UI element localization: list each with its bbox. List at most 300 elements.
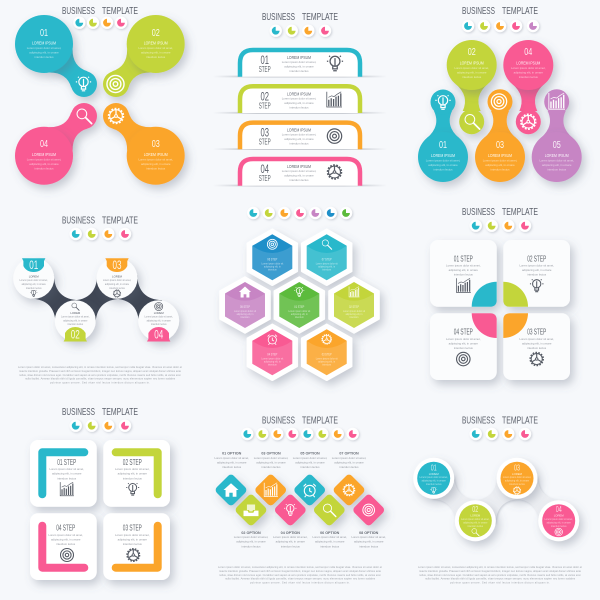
option 07 — [332, 452, 366, 507]
option 02: interdum lectus — [242, 544, 261, 548]
step 03: STEP — [259, 138, 271, 147]
pin 05: LOREM IPSUM — [545, 153, 569, 158]
title: TEMPLATE — [502, 414, 538, 426]
hexagon pink: interdum — [268, 363, 277, 366]
connectors — [431, 475, 562, 524]
pin 04: adipiscing elit, in ornare — [514, 70, 543, 74]
paragraph: tellus, vitae dictum nisl cursus eget. Curabitur sed sapien at arcu pretium vulputate, morbi rhoncus mauris sed felis mollis, at varius erat — [220, 573, 381, 577]
panel: honeycomb — [220, 207, 379, 380]
option 07: interdum lectus — [340, 465, 359, 469]
hexagon teal: interdum — [322, 268, 331, 271]
hexagon lime — [329, 277, 379, 333]
paragraph: nulla facilisi. Aenean blandit nibh id ligula convallis, vitae tempus neque semper, nunc elementum sapien nec lorem sodales — [425, 576, 576, 580]
node 03: 03 — [514, 464, 520, 472]
title: BUSINESS — [62, 214, 95, 226]
lobe 02: Lorem ipsum dolor sit amet, — [138, 46, 173, 50]
option 02 — [234, 493, 268, 548]
hexagon green: 01 STEP — [294, 305, 305, 309]
card 04 — [430, 313, 497, 380]
step 02: 02 — [260, 89, 269, 103]
node 02: interdum lectus — [68, 323, 84, 326]
colour key — [70, 228, 131, 240]
card 02 — [103, 440, 170, 507]
option 03: interdum lectus — [262, 465, 281, 469]
node 03: Lorem ipsum dolor sit amet, — [103, 279, 132, 282]
hexagon orange: Lorem ipsum dolor sit — [316, 357, 338, 360]
hexagon blue: 06 STEP — [267, 257, 278, 261]
card 04: 04 STEP — [56, 524, 75, 533]
step 03: adipiscing elit, in ornare — [284, 137, 314, 141]
card 03 — [503, 313, 570, 380]
card 03: 03 STEP — [527, 328, 546, 336]
step 03 — [213, 123, 387, 150]
lobe 03: adipiscing elit, in ornare — [141, 162, 171, 166]
colour key — [462, 20, 539, 32]
panel: five pins — [418, 5, 582, 182]
step 01: LOREM IPSUM — [287, 55, 311, 60]
node 03 — [96, 258, 138, 299]
hexagon lime: 02 STEP — [349, 305, 360, 309]
node 01: Lorem ipsum dolor sit amet, — [420, 476, 448, 479]
step 04: STEP — [259, 174, 271, 183]
card 02: interdum lectus — [527, 272, 547, 276]
option 07: adipiscing elit, in ornare — [334, 460, 364, 464]
pin 01: LOREM IPSUM — [431, 153, 455, 158]
node 04: Lorem ipsum dolor sit amet, — [145, 316, 173, 318]
card 02: interdum lectus — [123, 476, 142, 480]
step 04 — [213, 159, 387, 186]
option 05: interdum lectus — [301, 465, 320, 469]
hexagon purple — [220, 277, 270, 333]
step 02: Lorem ipsum dolor sit amet, — [282, 96, 316, 100]
pin 04: Lorem ipsum dolor sit amet, — [511, 66, 546, 70]
card 03: Lorem ipsum dolor sit amet, — [519, 337, 554, 341]
pin 05: interdum lectus — [547, 168, 567, 172]
lobe 02: LOREM IPSUM — [144, 40, 168, 46]
step 04: Lorem ipsum dolor sit amet, — [282, 169, 316, 173]
title: BUSINESS — [62, 406, 95, 418]
node 02 — [455, 500, 496, 541]
option 06: 06 OPTION — [320, 531, 340, 535]
panel: four lobes — [15, 5, 185, 185]
title: TEMPLATE — [102, 214, 138, 226]
title: BUSINESS — [262, 11, 295, 23]
step 01 — [213, 50, 387, 77]
hexagon green: interdum — [295, 316, 304, 319]
node 02 — [55, 300, 96, 342]
pin 04: 04 — [524, 47, 533, 58]
paragraph: mauris interdum gravida. Praesent sed nibh at lorem feugiat tincidunt, integer nec lectus magna, aliquam erat volutpat donec ultrices ante — [19, 369, 182, 373]
lobe 01: 01 — [40, 28, 48, 39]
card 03: Lorem ipsum dolor sit amet, — [115, 533, 150, 537]
node 03: Lorem ipsum dolor sit amet, — [503, 476, 532, 479]
hexagon pink: Lorem ipsum dolor sit — [261, 357, 284, 360]
hexagon green — [274, 277, 324, 333]
lobe 02: interdum lectus — [146, 55, 166, 59]
pin 01 — [418, 90, 468, 182]
title — [462, 414, 538, 426]
lobe 04: LOREM IPSUM — [32, 152, 56, 157]
colour key — [470, 428, 531, 440]
step 03: interdum lectus — [290, 142, 309, 146]
node 04 — [538, 500, 579, 541]
card 01: adipiscing elit, in ornare — [449, 268, 478, 272]
node 04 — [138, 300, 179, 342]
card 04: 04 STEP — [454, 328, 473, 336]
card 03: adipiscing elit, in ornare — [522, 342, 552, 346]
card 03: interdum lectus — [123, 542, 142, 546]
lobe 02: adipiscing elit, in ornare — [141, 50, 171, 54]
step 04: adipiscing elit, in ornare — [284, 174, 314, 178]
card 02: 02 STEP — [123, 458, 142, 467]
hexagon lime: interdum — [350, 316, 359, 319]
hexagon orange: adipiscing elit, in — [318, 360, 336, 363]
card 04: adipiscing elit, in ornare — [51, 538, 81, 542]
node 01: LOREM — [429, 472, 439, 476]
node 04: adipiscing elit, in ornare — [147, 320, 171, 322]
step 01: STEP — [259, 65, 271, 74]
pin 02: Lorem ipsum dolor sit amet, — [454, 66, 489, 70]
step 02 — [213, 86, 387, 114]
option 04: interdum lectus — [281, 544, 300, 548]
card 03: adipiscing elit, in ornare — [118, 538, 147, 542]
option 07: Lorem ipsum dolor sit amet, — [332, 456, 366, 460]
pin 05: Lorem ipsum dolor sit amet, — [539, 158, 574, 162]
node 01: interdum lectus — [26, 287, 42, 290]
node 04: LOREM — [554, 514, 564, 518]
title — [62, 214, 138, 226]
pin 01: interdum lectus — [434, 168, 453, 172]
node 03: interdum lectus — [509, 483, 526, 486]
paragraph: mauris interdum gravida. Praesent sed nibh at lorem feugiat tincidunt, integer nec lectus magna, aliquam erat volutpat donec ultrices ante — [419, 569, 582, 573]
title: BUSINESS — [462, 5, 495, 17]
card 03: 03 STEP — [123, 524, 142, 533]
title — [462, 206, 538, 218]
pin 05: adipiscing elit, in ornare — [542, 163, 572, 167]
lobe 01 — [15, 15, 97, 97]
title — [462, 5, 538, 17]
hexagon pink: adipiscing elit, in — [264, 360, 281, 363]
card 01: interdum lectus — [454, 272, 473, 276]
node 01 — [13, 258, 54, 299]
colour key — [247, 207, 352, 219]
lobe 04: adipiscing elit, in ornare — [29, 162, 59, 166]
hexagon orange: 03 STEP — [322, 352, 332, 356]
option 06 — [312, 493, 347, 548]
pin 05: 05 — [553, 140, 561, 151]
step 01: Lorem ipsum dolor sit amet, — [282, 60, 316, 64]
hexagon lime: adipiscing elit, in — [346, 313, 363, 316]
step 03: LOREM IPSUM — [287, 128, 311, 133]
node 03 — [496, 458, 538, 499]
card 04: Lorem ipsum dolor sit amet, — [48, 533, 83, 537]
card 02: 02 STEP — [527, 254, 546, 263]
card 04 — [30, 513, 97, 580]
node 03: interdum lectus — [109, 287, 126, 290]
option 05: 05 OPTION — [300, 452, 320, 456]
option 07: 07 OPTION — [339, 452, 359, 456]
node 04: adipiscing elit, in ornare — [547, 521, 571, 524]
pin 01: Lorem ipsum dolor sit amet, — [426, 158, 460, 162]
lobe 02: 02 — [152, 28, 160, 39]
paragraph: tellus, vitae dictum nisl cursus eget. Curabitur sed sapien at arcu pretium vulputate, morbi rhoncus mauris sed felis mollis, at varius erat — [20, 373, 181, 377]
node 02: LOREM — [470, 514, 481, 518]
node 01: adipiscing elit, in ornare — [22, 283, 46, 286]
title — [262, 11, 338, 23]
colour key — [241, 428, 359, 440]
lobe 03: Lorem ipsum dolor sit amet, — [138, 158, 173, 162]
lobe 04: interdum lectus — [35, 166, 54, 170]
option 08: adipiscing elit, in ornare — [354, 540, 384, 544]
pin 03: Lorem ipsum dolor sit amet, — [483, 158, 517, 162]
option 05: adipiscing elit, in ornare — [295, 460, 325, 464]
node 01 — [413, 458, 454, 499]
node 02: Lorem ipsum dolor sit amet, — [61, 316, 90, 318]
node 01: interdum lectus — [426, 483, 442, 486]
lobe 04: Lorem ipsum dolor sit amet, — [27, 158, 61, 162]
node 01: LOREM — [29, 274, 39, 278]
hexagon blue: Lorem ipsum dolor sit — [261, 262, 284, 265]
option 01 — [214, 452, 249, 507]
pin 02: 02 — [468, 47, 476, 58]
title: BUSINESS — [262, 414, 295, 426]
card 01 — [430, 240, 497, 307]
colour key — [70, 420, 131, 432]
card 01 — [30, 440, 97, 507]
lobe 04: 04 — [40, 139, 48, 150]
lobe 01: adipiscing elit, in ornare — [29, 50, 59, 54]
node 04: interdum lectus — [151, 323, 167, 326]
hexagon pink: 04 STEP — [267, 352, 278, 356]
paragraph: Lorem ipsum dolor sit amet, consectetur adipiscing elit, in ornare interdum lectus, sed tempor nulla feugiat vitae. Vivamus sit amet dolor et — [218, 565, 382, 569]
pin 02: interdum lectus — [462, 75, 482, 79]
lobe 02 — [103, 15, 185, 97]
step 01: adipiscing elit, in ornare — [284, 64, 314, 68]
card 04: Lorem ipsum dolor sit amet, — [446, 337, 481, 341]
panel: dark timeline — [13, 214, 182, 384]
pin 01: adipiscing elit, in ornare — [428, 163, 458, 167]
card 01: Lorem ipsum dolor sit amet, — [49, 467, 84, 471]
lobe 04 — [15, 103, 97, 185]
lobe 01: LOREM IPSUM — [32, 40, 56, 46]
paragraph — [18, 365, 182, 384]
option 04 — [273, 493, 308, 548]
step 03: 03 — [260, 126, 269, 140]
panel: diamond options — [214, 414, 386, 584]
pin 04: LOREM IPSUM — [516, 60, 540, 66]
hexagon lime: Lorem ipsum dolor sit — [343, 310, 365, 313]
node 01: adipiscing elit, in ornare — [422, 480, 446, 482]
pin 01: 01 — [439, 140, 447, 151]
paragraph — [418, 565, 582, 584]
node 04: 04 — [154, 330, 164, 342]
step 04: 04 — [260, 162, 269, 176]
title: TEMPLATE — [302, 414, 338, 426]
paragraph: nulla facilisi. Aenean blandit nibh id ligula convallis, vitae tempus neque semper, nunc elementum sapien nec lorem sodales — [225, 576, 376, 580]
pin 02: LOREM IPSUM — [460, 60, 484, 66]
hexagon purple: 05 STEP — [240, 305, 251, 309]
step 04: interdum lectus — [290, 178, 309, 182]
pin 05 — [532, 89, 582, 182]
node 02: 02 — [472, 505, 479, 514]
node 02: interdum lectus — [468, 525, 484, 528]
option 02: Lorem ipsum dolor sit amet, — [234, 535, 268, 539]
paragraph — [218, 565, 382, 584]
paragraph: Lorem ipsum dolor sit amet, consectetur adipiscing elit, in ornare interdum lectus, sed tempor nulla feugiat vitae. Vivamus sit amet dolor et — [418, 565, 582, 569]
option 01: adipiscing elit, in ornare — [217, 460, 247, 464]
node 03: 03 — [112, 260, 122, 272]
option 06: adipiscing elit, in ornare — [315, 540, 345, 544]
node 03: adipiscing elit, in ornare — [105, 283, 130, 286]
step 02: adipiscing elit, in ornare — [284, 101, 314, 105]
option 08: interdum lectus — [359, 544, 379, 548]
hexagon purple: adipiscing elit, in — [237, 313, 254, 316]
option 05 — [293, 452, 327, 507]
pin 03: LOREM IPSUM — [488, 153, 512, 158]
node 03: LOREM — [512, 472, 523, 476]
node 04: 04 — [556, 505, 562, 514]
title: TEMPLATE — [302, 11, 338, 23]
card 04: adipiscing elit, in ornare — [449, 342, 478, 346]
colour key — [270, 24, 331, 37]
option 04: Lorem ipsum dolor sit amet, — [273, 535, 308, 539]
node 03: LOREM — [112, 274, 123, 278]
node 02: adipiscing elit, in ornare — [63, 320, 88, 322]
step 02: LOREM IPSUM — [287, 91, 311, 96]
pin 03: 03 — [496, 140, 504, 151]
hexagon blue: interdum — [268, 268, 277, 271]
title: TEMPLATE — [502, 5, 538, 17]
colour key — [470, 220, 531, 232]
option 01: 01 OPTION — [222, 452, 242, 456]
card 02: Lorem ipsum dolor sit amet, — [519, 264, 554, 268]
title: BUSINESS — [62, 5, 95, 17]
title — [62, 406, 138, 418]
option 04: adipiscing elit, in ornare — [276, 540, 305, 544]
hexagon orange: interdum — [322, 363, 331, 366]
card 02: adipiscing elit, in ornare — [118, 472, 147, 476]
step 02: interdum lectus — [290, 105, 309, 109]
card 01: 01 STEP — [454, 254, 473, 263]
node 01: 01 — [29, 260, 38, 272]
paragraph: nulla facilisi. Aenean blandit nibh id ligula convallis, vitae tempus neque semper, nunc elementum sapien nec lorem sodales — [25, 376, 176, 380]
hexagon teal: adipiscing elit, in — [318, 265, 336, 268]
card 01: 01 STEP — [57, 458, 76, 467]
hexagon green: Lorem ipsum dolor sit — [288, 310, 311, 313]
option 01: interdum lectus — [222, 465, 242, 469]
lobe 03 — [103, 103, 185, 185]
step 01: interdum lectus — [290, 69, 309, 73]
panel: stacked steps — [213, 11, 387, 186]
card 03: interdum lectus — [527, 346, 547, 350]
panel: four cards with quarter circles — [430, 206, 570, 380]
hexagon purple: interdum — [241, 316, 250, 319]
paragraph: tellus, vitae dictum nisl cursus eget. Curabitur sed sapien at arcu pretium vulputate, morbi rhoncus mauris sed felis mollis, at varius erat — [420, 573, 581, 577]
connectors — [31, 275, 162, 324]
option 08: 08 OPTION — [359, 531, 379, 535]
title: BUSINESS — [462, 414, 495, 426]
lobe 01: interdum lectus — [35, 55, 54, 59]
pin 02: adipiscing elit, in ornare — [457, 70, 487, 74]
option 05: Lorem ipsum dolor sit amet, — [293, 456, 327, 460]
step 04: LOREM IPSUM — [287, 164, 311, 169]
option 04: 04 OPTION — [281, 531, 300, 535]
pin 03 — [475, 89, 525, 182]
step 03: Lorem ipsum dolor sit amet, — [282, 133, 316, 137]
step 02: STEP — [259, 101, 271, 110]
option 06: interdum lectus — [320, 544, 340, 548]
title: TEMPLATE — [502, 206, 538, 218]
lobe 03: interdum lectus — [146, 166, 166, 170]
card 02: Lorem ipsum dolor sit amet, — [115, 467, 150, 471]
option 03 — [254, 452, 288, 507]
option 03: adipiscing elit, in ornare — [256, 460, 286, 464]
lobe 03: LOREM IPSUM — [144, 152, 168, 157]
node 04: Lorem ipsum dolor sit amet, — [545, 518, 573, 521]
pin 04: interdum lectus — [519, 75, 538, 79]
node 01: Lorem ipsum dolor sit amet, — [20, 279, 48, 282]
pin 04 — [503, 40, 553, 134]
node 03: adipiscing elit, in ornare — [505, 480, 530, 482]
node 02: adipiscing elit, in ornare — [463, 521, 488, 524]
hexagon pink — [247, 324, 297, 380]
paragraph: pulvinar quam ornare. Sed vitae nisl lectus interdum dictum aliquam in. — [450, 580, 550, 584]
card 01: adipiscing elit, in ornare — [52, 472, 82, 476]
node 02: Lorem ipsum dolor sit amet, — [461, 518, 490, 521]
hexagon blue — [247, 229, 297, 285]
title: TEMPLATE — [102, 406, 138, 418]
lobe 03: 03 — [152, 139, 160, 150]
pin 03: adipiscing elit, in ornare — [485, 163, 515, 167]
card 04: interdum lectus — [454, 346, 473, 350]
card 01: interdum lectus — [57, 476, 77, 480]
lobe 01: Lorem ipsum dolor sit amet, — [27, 46, 61, 50]
panel: four cards with corner brackets — [30, 406, 170, 580]
hexagon purple: Lorem ipsum dolor sit — [234, 310, 256, 313]
option 08 — [351, 493, 386, 548]
hexagon teal: 07 STEP — [322, 257, 332, 261]
colour key — [73, 16, 127, 29]
option 03: 03 OPTION — [261, 452, 281, 456]
hexagon orange — [302, 324, 352, 380]
option 08: Lorem ipsum dolor sit amet, — [351, 535, 386, 539]
node 02: 02 — [71, 330, 80, 342]
option 06: Lorem ipsum dolor sit amet, — [312, 535, 347, 539]
title: TEMPLATE — [102, 5, 138, 17]
option 01: Lorem ipsum dolor sit amet, — [214, 456, 249, 460]
panel: ringed circles timeline — [413, 414, 582, 584]
option 02: 02 OPTION — [241, 531, 261, 535]
title — [262, 414, 338, 426]
node 02: LOREM — [70, 311, 81, 315]
card 01: Lorem ipsum dolor sit amet, — [446, 264, 481, 268]
option 02: adipiscing elit, in ornare — [236, 540, 266, 544]
node 01: 01 — [431, 464, 437, 472]
node 04: LOREM — [154, 311, 164, 315]
hexagon teal: Lorem ipsum dolor sit — [316, 262, 338, 265]
step 01: 01 — [260, 53, 269, 67]
pin 02 — [447, 40, 497, 134]
hexagon blue: adipiscing elit, in — [264, 265, 281, 268]
title — [62, 5, 138, 17]
card 02 — [503, 240, 570, 307]
paragraph: pulvinar quam ornare. Sed vitae nisl lectus interdum dictum aliquam in. — [250, 580, 350, 584]
pin 03: interdum lectus — [491, 168, 510, 172]
card 03 — [103, 513, 170, 580]
paragraph: pulvinar quam ornare. Sed vitae nisl lectus interdum dictum aliquam in. — [50, 380, 150, 384]
card 02: adipiscing elit, in ornare — [522, 268, 552, 272]
card 04: interdum lectus — [56, 542, 76, 546]
